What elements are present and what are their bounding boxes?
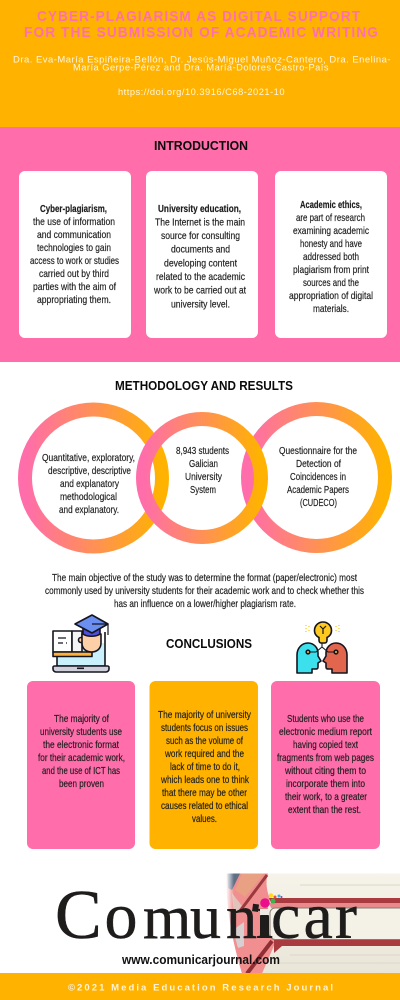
logo: comunicar: C — [55, 877, 102, 954]
icon: graduate with laptop and book — [53, 615, 109, 672]
authors — [13, 54, 391, 74]
copyright: ©2021 Media Education Research Journal — [68, 982, 333, 994]
card: academic ethics: honesty and have — [300, 238, 362, 250]
card: academic ethics: addressed both — [303, 251, 359, 263]
card: workload and time — [150, 681, 258, 849]
card: academic ethics: Academic ethics, — [300, 199, 362, 211]
heading: methodology and results: METHODOLOGY AND RESULTS — [115, 378, 293, 393]
text: sample — [176, 445, 229, 496]
card: university education: source for consulting — [161, 230, 240, 242]
ring: middle — [143, 419, 261, 537]
photo: stack of books — [226, 874, 400, 974]
logo mark: i stem and square dot — [252, 904, 269, 938]
card: cyber-plagiarism — [19, 171, 131, 338]
card: workload and time: which leads one to think — [160, 774, 250, 786]
card: cyber-plagiarism: parties with the aim of — [33, 281, 116, 293]
card: copied fragments: electronic medium report — [279, 726, 372, 738]
text: sample: University — [185, 471, 223, 483]
logo: comunicar — [58, 891, 357, 939]
logo: comunicar: muni — [143, 884, 273, 952]
card: academic ethics: examining academic — [293, 225, 369, 237]
doi link: https://doi.org/10.3916/C68-2021-10 — [118, 87, 285, 98]
card: cyber-plagiarism: carried out by third — [39, 268, 109, 280]
text: design: and explanatory. — [59, 504, 119, 516]
heading: introduction: INTRODUCTION — [154, 138, 248, 153]
card: cyber-plagiarism: technologies to gain — [37, 242, 111, 254]
card: cyber-plagiarism: appropriating them. — [37, 294, 111, 306]
card: workload and time: such as the volume of — [166, 735, 243, 747]
card: workload and time: students focus on issues — [161, 722, 248, 734]
header banner — [0, 0, 400, 127]
card: academic ethics: plagiarism from print — [293, 264, 369, 276]
card: copied fragments — [271, 681, 380, 849]
card: copied fragments: incorporate them into — [286, 778, 365, 790]
card: cyber-plagiarism: access to work or studies — [30, 255, 119, 267]
text: design: methodological — [60, 491, 117, 503]
text: main objective: has an influence on a lower/higher plagiarism rate. — [114, 598, 296, 610]
logo: comunicar: car — [271, 880, 357, 953]
card: workload and time: lack of time to do it, — [170, 761, 240, 773]
card: university education: university level. — [171, 298, 230, 310]
card: electronic format: been proven — [59, 778, 104, 790]
card: copied fragments: their work, to a greater — [285, 791, 367, 803]
card: workload and time: causes related to ethical — [161, 800, 248, 812]
title — [24, 8, 379, 41]
card: electronic format: the electronic format — [43, 739, 119, 751]
text: instrument: Detection of — [296, 458, 341, 470]
card: cyber-plagiarism: the use of information — [33, 216, 115, 228]
card: university education: work to be carried out at — [153, 285, 246, 297]
venn diagram: three rings — [25, 409, 385, 546]
website url: www.comunicarjournal.com — [121, 953, 280, 967]
text: sample: System — [190, 484, 216, 496]
ring: left — [25, 410, 162, 546]
title: CYBER-PLAGIARISM AS DIGITAL SUPPORT — [37, 8, 361, 25]
ring: right — [248, 409, 385, 546]
card: workload and time: work required and the — [164, 748, 244, 760]
card: workload and time: The majority of university — [158, 709, 252, 721]
logo dots — [260, 893, 282, 908]
card: electronic format — [27, 681, 135, 849]
authors: María Gerpe-Pérez and Dra. María-Dolores Castro-País — [73, 62, 329, 74]
card: university education: developing content — [164, 258, 237, 270]
text: sample: 8,943 students — [176, 445, 229, 457]
card: university education: related to the academic — [156, 271, 245, 283]
heading: conclusions: CONCLUSIONS — [166, 636, 252, 651]
card: university education: The Internet is the main — [155, 216, 245, 228]
card: copied fragments: without citing them to — [284, 765, 366, 777]
text: instrument: (CUDECO) — [300, 497, 337, 509]
card: electronic format: and the use of ICT has — [42, 765, 120, 777]
card: workload and time: that there may be other — [162, 787, 247, 799]
panel: introduction — [0, 127, 400, 362]
text: design: Quantitative, exploratory, — [42, 452, 135, 464]
card: copied fragments: fragments from web pages — [277, 752, 374, 764]
card: copied fragments: having copied text — [293, 739, 358, 751]
card: workload and time: values. — [192, 813, 217, 825]
card: electronic format: The majority of — [54, 713, 109, 725]
text: design: descriptive, descriptive — [48, 465, 131, 477]
card: cyber-plagiarism: Cyber-plagiarism, — [40, 203, 107, 215]
card: academic ethics — [275, 171, 387, 338]
card: university education: University education, — [158, 203, 241, 215]
text: instrument: Coincidences in — [290, 471, 346, 483]
card: university education: documents and — [171, 244, 230, 256]
card: academic ethics: are part of research — [296, 212, 365, 224]
authors: Dra. Eva-María Espiñeira-Bellón, Dr. Jesús-Miguel Muñoz-Cantero, Dra. Enelina- — [13, 54, 391, 66]
footer bar — [0, 973, 400, 1000]
card: academic ethics: appropriation of digital — [289, 290, 373, 302]
card: academic ethics: materials. — [313, 303, 349, 315]
logo: comunicar: o — [104, 880, 138, 953]
card: university education — [146, 171, 258, 338]
icon: two heads sharing a light bulb — [297, 622, 347, 673]
card: cyber-plagiarism: and communication — [37, 229, 111, 241]
text: instrument: Questionnaire for the — [279, 445, 357, 457]
text: sample: Galician — [189, 458, 218, 470]
text: main objective — [45, 572, 364, 610]
text: design: and explanatory — [60, 478, 120, 490]
text: design — [42, 452, 135, 516]
text: instrument: Academic Papers — [287, 484, 349, 496]
card: electronic format: university students use — [40, 726, 122, 738]
card: electronic format: for their academic work, — [38, 752, 125, 764]
text: instrument — [279, 445, 357, 509]
card: copied fragments: extent than the rest. — [288, 804, 361, 816]
card: copied fragments: Students who use the — [287, 713, 364, 725]
card: academic ethics: sources and the — [303, 277, 359, 289]
